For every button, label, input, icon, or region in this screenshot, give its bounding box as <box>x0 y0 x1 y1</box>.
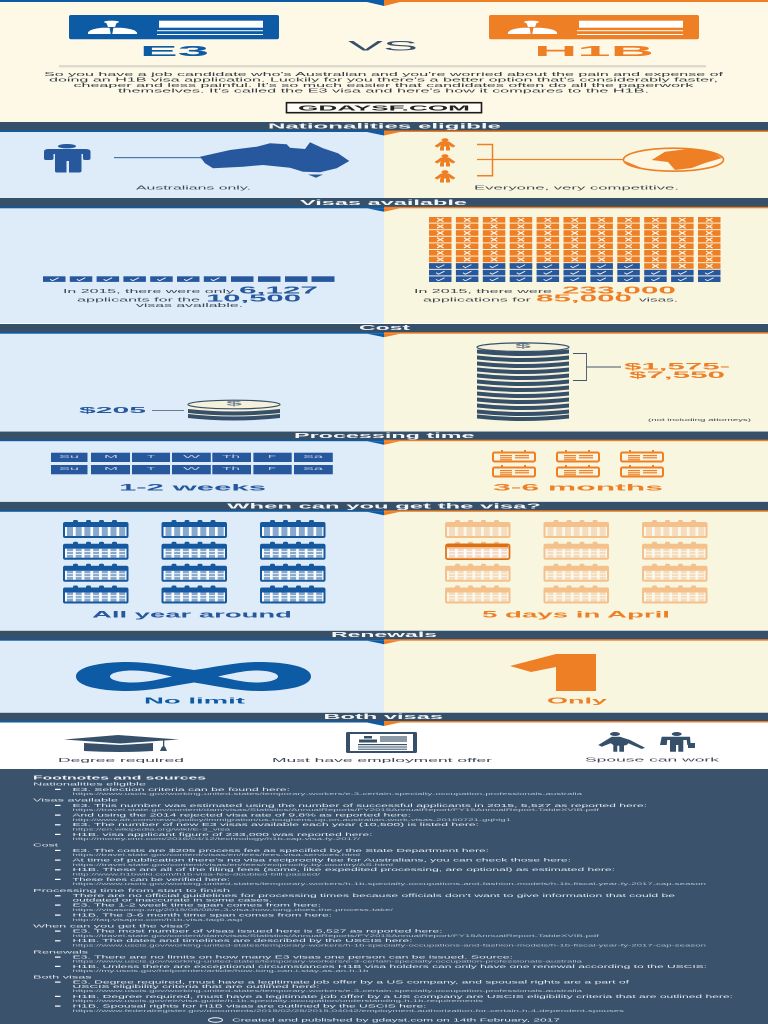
icon: number one <box>510 654 596 691</box>
label: only: Only <box>547 697 609 706</box>
icon: globe <box>624 148 724 171</box>
week row 1: M <box>104 454 118 460</box>
website box: GDAYSF.COM <box>298 103 470 112</box>
text: E3 visas stat <box>63 285 319 309</box>
caption: must have employment offer: Must have employment offer <box>272 758 493 764</box>
label: no limit: No limit <box>144 697 246 706</box>
footnotes: both visas: Both visas <box>33 974 94 980</box>
line: person to Australia <box>114 157 204 158</box>
footnotes: both visas: H1B. Degree required, must have a legitimate job offer by a US company are USCIS eligibility criteria that are outlined here: <box>72 994 733 999</box>
footnotes: processing time: Processing time from start to finish <box>33 888 231 893</box>
week row 1: Th <box>222 454 241 460</box>
intro paragraph: So you have a job candidate who's Australian and you're worried about the pain and expense of <box>44 72 725 78</box>
section bar: Visas available: Visas available <box>300 198 467 207</box>
footnotes: processing time: There are no official guidelines for processing times because officials don't want to give information that could be <box>72 893 677 898</box>
caption: spouse can work: Spouse can work <box>585 757 721 763</box>
footnotes: renewals: H1B. Unless there are exceptional circumstances H1B visa holders can only have one renewal according to the USCIS: <box>72 964 707 969</box>
footnotes: visas available: E3. The number of new E3 visas available each year (10,500) is listed here: <box>72 822 479 827</box>
note: not including attorneys: (not including attorneys) <box>648 418 751 422</box>
panel: both visas <box>0 722 768 769</box>
credit line <box>208 1018 562 1022</box>
footnotes: when can you get the visa: E3. The most number of visas issued here is 5,527 as reported here: <box>72 928 442 934</box>
footnotes: processing time: https://visascoop.org/2015/08/08/e-3-visa-how-long-does-the-process-take/ <box>72 908 393 912</box>
text: H1B visas stat: In 2015, there were <box>414 289 553 295</box>
caption: Australians only: Australians only. <box>136 186 251 192</box>
label: H1B cost <box>624 362 730 380</box>
icon: map of Australia <box>200 142 349 178</box>
footnotes: cost: https://travel.state.gov/content/visas/en/fees/fees-visa-services.html <box>72 853 361 857</box>
panel: cost left <box>0 333 384 431</box>
footnotes: both visas: H1B. Spousal rights for H1B visas are outlined by the USCIS here: <box>72 1004 426 1008</box>
footnotes: both visas <box>33 974 733 1013</box>
week row 1: W <box>183 454 202 460</box>
intro paragraph: cheaper and less painful. It's so much easier that candidates often do all the paperwork <box>74 83 695 89</box>
text: H1B visas stat: 85,000 <box>536 294 633 304</box>
icon: tall coin stack <box>477 343 569 421</box>
footnotes: visas available <box>33 798 647 841</box>
credit line: Created and published by gdayst.com on 14th February, 2017 <box>232 1018 562 1022</box>
label: H1B cost: $1,575- <box>624 362 730 372</box>
section bar: Processing time: Processing time <box>294 431 474 440</box>
footnotes: cost: E3. The costs are $205 process fee as specified by the State Department here: <box>72 848 489 853</box>
footnotes: when can you get the visa: https://www.uscis.gov/working-united-states/temporary-workers/h-1b-specialty-occupations-and-fashion-models/h-1b-fiscal-year-fy-2017-cap-season <box>72 944 706 948</box>
icon: infinity <box>76 662 311 691</box>
week row 2: F <box>268 466 276 472</box>
section bar: Cost <box>0 323 768 337</box>
text: E3 visas stat: 6,127 <box>239 285 319 296</box>
footnotes: processing time: H1B. The 3-6 month time span comes from here: <box>72 912 332 918</box>
text: E3 visas stat: 10,500 <box>206 294 302 304</box>
icons: twelve blue calendars <box>63 520 326 604</box>
footnotes: renewals <box>33 950 707 973</box>
icon: H1B badge <box>489 15 699 39</box>
heading: E3: E3 <box>140 43 209 60</box>
panel: renewals left <box>0 640 384 712</box>
icon: small coin stack <box>188 400 280 420</box>
footnotes: cost: At time of publication there's no visa reciprocity fee for Australians, you can check those here: <box>72 858 571 862</box>
panel: when left <box>0 511 384 630</box>
intro paragraph: doing an H1B visa application. Luckily for you there's a better option that's considerably faster, <box>49 78 718 84</box>
section bar: Cost: Cost <box>359 323 412 332</box>
footnotes: cost: H1B. These are all of the filing fees (some, like expedited processing, are optional) as estimated here: <box>72 867 615 872</box>
week row 2: Su <box>59 466 80 472</box>
section bar: When can you get the visa? <box>0 501 768 515</box>
text: E3 visas stat: applicants for the <box>77 297 201 303</box>
week row 1: F <box>268 454 276 460</box>
icon: E3 badge <box>69 15 279 39</box>
panel: nationalities right <box>384 131 768 198</box>
intro paragraph: themselves. It's called the E3 visa and here's how it compares to the H1B. <box>118 89 649 95</box>
footnotes: visas available: Visas available <box>33 798 119 802</box>
heading: H1B: H1B <box>534 43 655 60</box>
footnotes: cost: https://www.uscis.gov/working-united-states/temporary-workers/h-1b-specialty-occupations-and-fashion-models/h-1b-fiscal-year-fy-2017-cap-season <box>72 882 706 886</box>
footnotes: when can you get the visa: H1B. The dates and timelines are described by the USCIS here: <box>72 938 412 943</box>
section bar: Processing time <box>0 431 768 445</box>
top colour strip <box>0 0 768 6</box>
panel: when right <box>384 511 768 630</box>
panel: processing left <box>0 440 384 501</box>
footnotes: both visas: https://www.uscis.gov/working-united-states/temporary-workers/e-3-certain-specialty-occupation-professionals-australia <box>72 989 582 993</box>
pictogram: E3 applicants <box>43 276 334 282</box>
icon: small coin stack: $ <box>226 402 245 408</box>
footnotes: visas available: E3. This number was estimated using the number of successful applicants in 2015, 5,527 as reported here: <box>72 803 647 808</box>
heading: VS: VS <box>348 38 418 54</box>
label: 5 days in April: 5 days in April <box>482 609 670 619</box>
footer background <box>0 769 768 1024</box>
panel: renewals right <box>384 640 768 712</box>
intro paragraph <box>44 72 725 95</box>
week row 1: T <box>147 454 155 460</box>
icons: faded orange calendars <box>445 520 708 604</box>
header background <box>0 0 768 122</box>
text: H1B visas stat <box>414 286 678 304</box>
footnotes: processing time <box>33 888 677 922</box>
label: 3-6 months: 3-6 months <box>493 482 663 492</box>
label: all year around: All year around <box>92 609 292 619</box>
section bar: When can you get the visa?: When can you get the visa? <box>227 501 542 510</box>
section bar: Both visas: Both visas <box>324 712 443 721</box>
panel: visas right <box>384 208 768 323</box>
footnotes: cost: http://www.h1bwiki.com/h1b-visa-fee-doubled-bill-passed/ <box>72 873 320 877</box>
label: H1B cost: $7,550 <box>629 370 725 380</box>
footnotes: when can you get the visa <box>33 924 706 948</box>
icon: couple <box>598 732 695 752</box>
section bar: Nationalities eligible: Nationalities eligible <box>268 122 501 130</box>
footnotes: visas available: https://en.wikipedia.org/wiki/E-3_visa <box>72 828 230 832</box>
label: $205: $205 <box>79 406 148 415</box>
text: E3 visas stat: In 2015, there were only <box>63 289 236 295</box>
section bar: Renewals <box>0 630 768 644</box>
section bar: Both visas <box>0 712 768 726</box>
week row 2 <box>51 465 333 474</box>
icon: highlighted April calendar <box>445 542 510 560</box>
footnotes: visas available: H1B. visa applicant figure of 233,000 was reported here: <box>72 832 372 837</box>
week row 2: Sa <box>303 466 324 472</box>
week row 2: M <box>104 466 118 472</box>
caption: degree required: Degree required <box>58 758 185 764</box>
footnotes: renewals: https://my.uscis.gov/helpcenter/article/how-long-can-i-stay-as-an-h-1b <box>72 969 369 973</box>
footnotes: processing time: E3. The 1-2 week time span comes from here: <box>72 902 321 908</box>
section bar: Visas available <box>0 198 768 212</box>
label: 1-2 weeks: 1-2 weeks <box>119 482 266 492</box>
footnotes: visas available: http://money.cnn.com/2016/04/12/technology/h1b-cap-visa-fy-2017/ <box>72 837 360 841</box>
icon: person <box>44 144 90 172</box>
icon: tall coin stack: $ <box>515 344 534 350</box>
footnotes: visas available: And using the 2014 rejected visa rate of 9.8% as reported here: <box>72 812 411 818</box>
icons: three people <box>434 138 456 182</box>
footnotes: both visas: https://www.federalregister.gov/documents/2015/02/25/2015-04042/employment-authorization-for-certain-h-4-dependent-spouses <box>72 1009 625 1013</box>
panel: cost right <box>384 333 768 431</box>
week row 1 <box>51 453 333 462</box>
week row 2: T <box>147 466 155 472</box>
footnotes: cost <box>33 842 706 886</box>
panel: nationalities left <box>0 131 384 198</box>
footnotes: when can you get the visa: When can you get the visa? <box>33 924 191 928</box>
footnotes: nationalities: https://www.uscis.gov/working-united-states/temporary-workers/e-3-certain-specialty-occupation-professionals-australia <box>72 792 582 796</box>
footnotes: nationalities <box>33 782 582 796</box>
week row 1: Su <box>59 454 80 460</box>
footnotes: when can you get the visa: https://travel.state.gov/content/dam/visas/Statistics/AnnualReports/FY2015AnnualReport/FY15AnnualReport-TableXVIB.pdf <box>72 934 599 938</box>
footer heading: Footnotes and sources <box>33 775 206 781</box>
section bar: Nationalities eligible <box>0 122 768 136</box>
icon: graduation cap <box>64 735 179 752</box>
footnotes: both visas: E3. Degree required, must have a legitimate job offer by a US company, and spousal rights are a part of <box>72 980 631 984</box>
week row 2: W <box>183 466 202 472</box>
text: H1B visas stat: visas. <box>639 297 678 303</box>
footnotes: both visas: USCIS eligibility criteria that are outlined here: <box>72 984 320 989</box>
footnotes: renewals: https://www.uscis.gov/working-united-states/temporary-workers/e-3-certain-specialty-occupation-professionals-australia <box>72 960 582 964</box>
panel: visas left <box>0 208 384 323</box>
pictogram: H1B applicants <box>429 217 720 282</box>
text: H1B visas stat: 233,000 <box>562 286 677 296</box>
panel: processing right <box>384 440 768 501</box>
section bar: Renewals: Renewals <box>331 630 437 639</box>
website box <box>286 103 482 113</box>
week row 1: Sa <box>303 454 324 460</box>
footnotes: cost: These fees can be verified here: <box>72 877 230 882</box>
bracket and line to globe <box>477 144 625 176</box>
footnotes: visas available: http://www.afr.com/news/policy/immigration/us-toughens-up-on-australian-work-visas-20160721-gqhig1 <box>72 818 511 822</box>
text: H1B visas stat: applications for <box>423 297 532 303</box>
footnotes: cost: https://travel.state.gov/content/visas/en/fees/reciprocity-by-country/AS.html <box>72 863 394 867</box>
footnotes: processing time: http://faq.visapro.com/h1b-visa-faq6.asp <box>72 918 243 922</box>
week row 2: Th <box>222 466 241 472</box>
footnotes: processing time: outdated or inaccurate in some cases. <box>72 898 272 902</box>
footnotes: renewals: Renewals <box>33 950 90 954</box>
footnotes: nationalities: E3. Selection criteria can be found here: <box>72 787 290 792</box>
footnotes: visas available: https://travel.state.gov/content/dam/visas/Statistics/AnnualReports/FY2015AnnualReport/FY15AnnualReport-TableXVIB.pdf <box>72 808 599 812</box>
footnotes: nationalities: Nationalities eligible <box>33 782 147 786</box>
text: E3 visas stat: visas available. <box>136 303 243 309</box>
icon: employment document <box>346 732 417 753</box>
footnotes: cost: Cost <box>33 842 60 848</box>
footnotes: renewals: E3. There are no limits on how many E3 visas one person can be issued. Source: <box>72 954 513 960</box>
footnotes: both visas: https://www.uscis.gov/eir/visa-guide/h-1b-specialty-occupation/understanding-h-1b-requirements <box>72 999 484 1003</box>
icons: six months calendars <box>493 450 663 476</box>
bracket: cost range <box>573 354 621 380</box>
caption: Everyone, very competitive: Everyone, very competitive. <box>474 186 679 192</box>
